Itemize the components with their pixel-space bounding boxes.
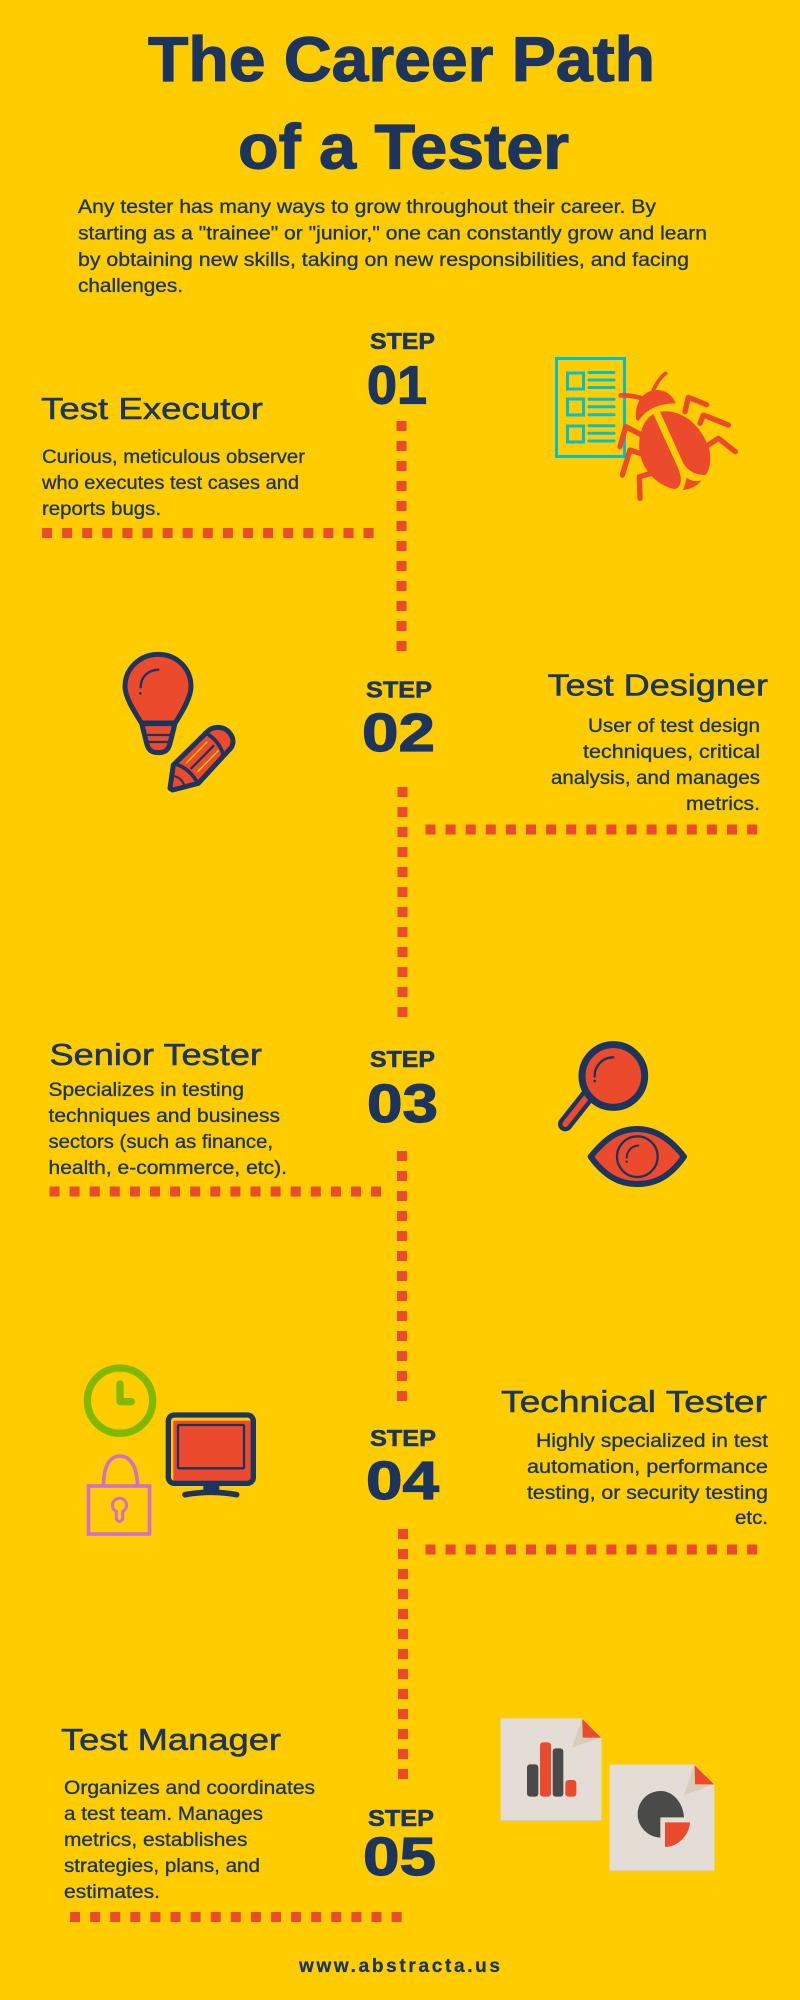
step 05 heading: Test Manager [61, 1722, 281, 1757]
icon: monitor [168, 1415, 253, 1495]
step 02 connector: vertical dotted line [398, 787, 408, 1017]
step 04 label: 04 [366, 1451, 439, 1511]
step 05 label [363, 1805, 436, 1887]
icon: light bulb [125, 654, 193, 753]
step 01 heading: Test Executor [41, 391, 263, 426]
step 01 label: 01 [367, 356, 427, 416]
icon: padlock [88, 1456, 150, 1534]
title: The Career Path [148, 25, 655, 95]
step 02 description: metrics. [686, 793, 760, 815]
title: of a Tester [238, 113, 569, 183]
step 04 description: automation, performance [527, 1456, 768, 1478]
step 05 description: metrics, establishes [64, 1829, 248, 1851]
step 03 heading: Senior Tester [50, 1037, 262, 1072]
step 02 label: 02 [362, 703, 435, 763]
step 02 heading: Test Designer [548, 668, 768, 703]
step 03 description: health, e-commerce, etc). [48, 1157, 287, 1179]
footer url: www.abstracta.us [298, 1956, 500, 1977]
step 05 description: estimates. [64, 1881, 160, 1903]
step 05 description: a test team. Manages [64, 1803, 263, 1825]
step 01 description: reports bugs. [42, 498, 161, 520]
step 05 description: strategies, plans, and [64, 1855, 260, 1877]
intro paragraph: challenges. [78, 275, 183, 297]
icon: checklist document [556, 358, 624, 456]
step 01 connector: horizontal dotted line [42, 528, 374, 538]
step 04 connector: horizontal dotted line [426, 1544, 757, 1554]
step 01 label [367, 328, 435, 416]
step 03 label [367, 1046, 438, 1134]
step 05 connector: horizontal dotted line [70, 1912, 402, 1922]
step 02 label [362, 677, 435, 763]
step 04 heading: Technical Tester [501, 1384, 767, 1419]
intro paragraph: starting as a "trainee" or "junior," one can constantly grow and learn [78, 222, 707, 244]
step 02 description: User of test design [588, 715, 760, 737]
step 03 label: STEP [370, 1046, 435, 1072]
step 03 label: 03 [367, 1074, 438, 1134]
step 04 connector: vertical dotted line [398, 1529, 408, 1779]
icon: magnifying glass [565, 1045, 645, 1124]
step 05 description: Organizes and coordinates [64, 1777, 315, 1799]
step 03 description: sectors (such as finance, [48, 1131, 273, 1153]
step 03 description [48, 1079, 287, 1179]
step 01 description: who executes test cases and [41, 472, 299, 494]
step 04 description [527, 1430, 769, 1529]
step 01 connector: vertical dotted line [396, 421, 406, 651]
step 04 label: STEP [370, 1425, 436, 1451]
intro paragraph [78, 196, 707, 297]
title [148, 25, 655, 183]
icon: pencil [170, 727, 233, 790]
step 04 label [366, 1425, 439, 1511]
step 02 label: STEP [366, 677, 432, 703]
step 02 description: analysis, and manages [551, 767, 760, 789]
step 03 description: techniques and business [48, 1105, 280, 1127]
step 01 label: STEP [370, 328, 435, 354]
step 05 description [64, 1777, 315, 1903]
step 05 label: STEP [368, 1805, 434, 1831]
step 03 connector: vertical dotted line [397, 1151, 407, 1401]
step 02 description [551, 715, 760, 815]
step 04 description: Highly specialized in test [536, 1430, 769, 1452]
intro paragraph: by obtaining new skills, taking on new responsibilities, and facing [78, 249, 689, 271]
icon: pie chart document [610, 1765, 714, 1871]
step 03 description: Specializes in testing [48, 1079, 244, 1101]
icon: bar chart document [501, 1718, 601, 1821]
icon: bug [620, 373, 735, 498]
step 01 description [41, 446, 306, 520]
intro paragraph: Any tester has many ways to grow throughout their career. By [78, 196, 656, 218]
icon: clock [87, 1368, 153, 1433]
step 05 label: 05 [363, 1827, 436, 1887]
icon: eye [591, 1129, 686, 1185]
step 04 description: testing, or security testing [527, 1482, 768, 1504]
step 02 connector: horizontal dotted line [426, 824, 757, 834]
step 03 connector: horizontal dotted line [50, 1186, 381, 1196]
step 04 description: etc. [735, 1507, 768, 1529]
step 02 description: techniques, critical [583, 741, 760, 763]
step 01 description: Curious, meticulous observer [42, 446, 306, 468]
